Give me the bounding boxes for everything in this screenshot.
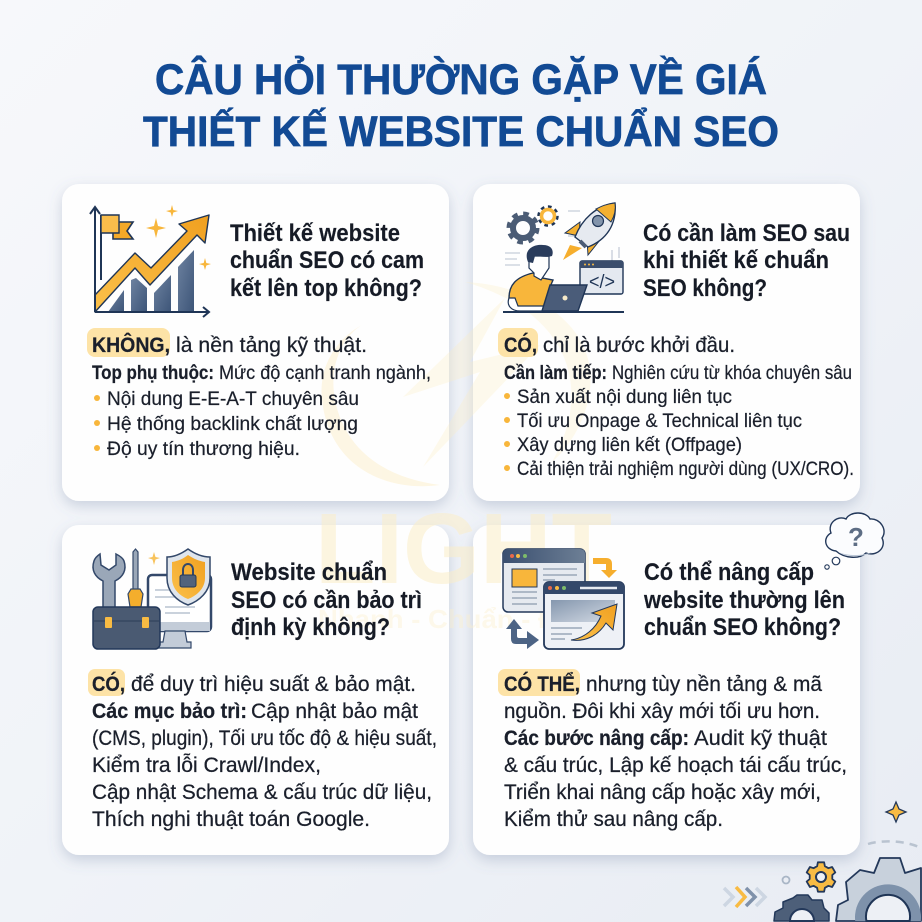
answer text: Cần làm tiếp: [504, 362, 607, 384]
answer text: Kiểm tra lỗi Crawl/Index, [92, 752, 321, 777]
panel: cam kết lên top [87, 205, 431, 460]
heading: định kỳ không? [231, 614, 390, 641]
watermark wordmark: Nhanh - Chuẩn - Đẹp [318, 604, 590, 634]
heading: Có thể nâng cấp [644, 559, 814, 586]
answer text: Các mục bảo trì: [92, 699, 247, 723]
icon: thought bubble with question mark: ? [848, 522, 864, 552]
heading [231, 559, 422, 641]
title: CÂU HỎI THƯỜNG GẶP VỀ GIÁ [155, 55, 767, 104]
heading: chuẩn SEO có cam [230, 247, 424, 274]
heading: website thường lên [643, 587, 845, 614]
answer text: là nền tảng kỹ thuật. [176, 333, 367, 357]
answer text: (CMS, plugin), Tối ưu tốc độ & hiệu suất, [92, 726, 437, 750]
heading: SEO có cần bảo trì [231, 587, 422, 614]
answer text [92, 671, 437, 831]
panel backgrounds [62, 184, 860, 855]
icon: dark gear [774, 895, 829, 921]
icon: tools and security shield [93, 549, 211, 649]
answer text: nhưng tùy nền tảng & mã [586, 672, 822, 696]
icon: browser windows upgrade [503, 549, 624, 649]
heading [230, 220, 424, 302]
answer highlight [88, 669, 125, 696]
heading: Thiết kế website [230, 220, 400, 247]
icon: thought bubble with question mark [825, 513, 884, 569]
answer text: chỉ là bước khởi đầu. [543, 333, 735, 357]
bullet list: Nội dung E-E-A-T chuyên sâu [107, 388, 359, 410]
title: THIẾT KẾ WEBSITE CHUẨN SEO [143, 107, 779, 156]
heading: Website chuẩn [231, 559, 387, 586]
answer text: nguồn. Đôi khi xây mới tối ưu hơn. [504, 699, 820, 723]
bullet list: Cải thiện trải nghiệm người dùng (UX/CRO). [517, 458, 854, 480]
heading [643, 220, 850, 302]
bullet list [94, 388, 359, 460]
bullet list: Hệ thống backlink chất lượng [107, 413, 358, 435]
panel: làm SEO sau thiết kế [498, 203, 854, 480]
answer highlight [498, 669, 580, 696]
icon: small ring [782, 876, 790, 884]
decoration: gears and chevrons [724, 841, 921, 921]
answer text: Các bước nâng cấp: [504, 726, 689, 750]
heading: khi thiết kế chuẩn [643, 247, 829, 274]
panel: bảo trì định kỳ [88, 549, 437, 831]
bullet list: Xây dựng liên kết (Offpage) [517, 434, 742, 456]
answer text: CÓ THỂ, [504, 671, 580, 696]
heading: SEO không? [643, 275, 767, 302]
icon: developer with rocket [503, 203, 624, 312]
answer text: Kiểm thử sau nâng cấp. [504, 807, 723, 831]
answer highlight [87, 328, 170, 357]
icon: sparkle [886, 802, 906, 822]
answer text: CÓ, [92, 671, 125, 696]
answer text: KHÔNG, [92, 332, 170, 357]
answer text [92, 332, 431, 384]
answer text: để duy trì hiệu suất & bảo mật. [131, 672, 416, 696]
icon: yellow gear [807, 862, 835, 892]
icon: growth chart with flag [90, 205, 211, 317]
answer text: Triển khai nâng cấp hoặc xây mới, [504, 780, 821, 804]
icon: chevrons [724, 887, 765, 907]
answer text [504, 332, 852, 384]
answer highlight [498, 328, 538, 357]
heading: Có cần làm SEO sau [643, 220, 850, 247]
answer text: Nghiên cứu từ khóa chuyên sâu [612, 362, 852, 384]
answer text: CÓ, [504, 332, 537, 357]
answer text: Thích nghi thuật toán Google. [92, 807, 370, 831]
answer text: & cấu trúc, Lập kế hoạch tái cấu trúc, [504, 753, 847, 777]
dashed arc [868, 841, 921, 848]
answer text: Audit kỹ thuật [694, 726, 827, 750]
answer text: Top phụ thuộc: [92, 362, 214, 384]
icon: developer with rocket: </> [589, 272, 615, 293]
bullet list: Sản xuất nội dung liên tục [517, 386, 732, 408]
watermark logo [321, 282, 591, 486]
answer text [504, 671, 847, 831]
bullet list: Tối ưu Onpage & Technical liên tục [517, 410, 802, 432]
heading: chuẩn SEO không? [644, 614, 841, 641]
answer text: Mức độ cạnh tranh ngành, [219, 362, 431, 384]
watermark wordmark: LIGHT [315, 493, 612, 605]
bullet list [504, 386, 854, 480]
title [143, 55, 779, 156]
bullet list: Độ uy tín thương hiệu. [107, 438, 300, 460]
heading: kết lên top không? [230, 275, 422, 302]
icon: large gear [836, 858, 921, 921]
answer text: Cập nhật Schema & cấu trúc dữ liệu, [92, 780, 432, 804]
answer text: Cập nhật bảo mật [251, 699, 418, 723]
panel: nâng cấp website [498, 549, 847, 831]
heading [643, 559, 845, 641]
